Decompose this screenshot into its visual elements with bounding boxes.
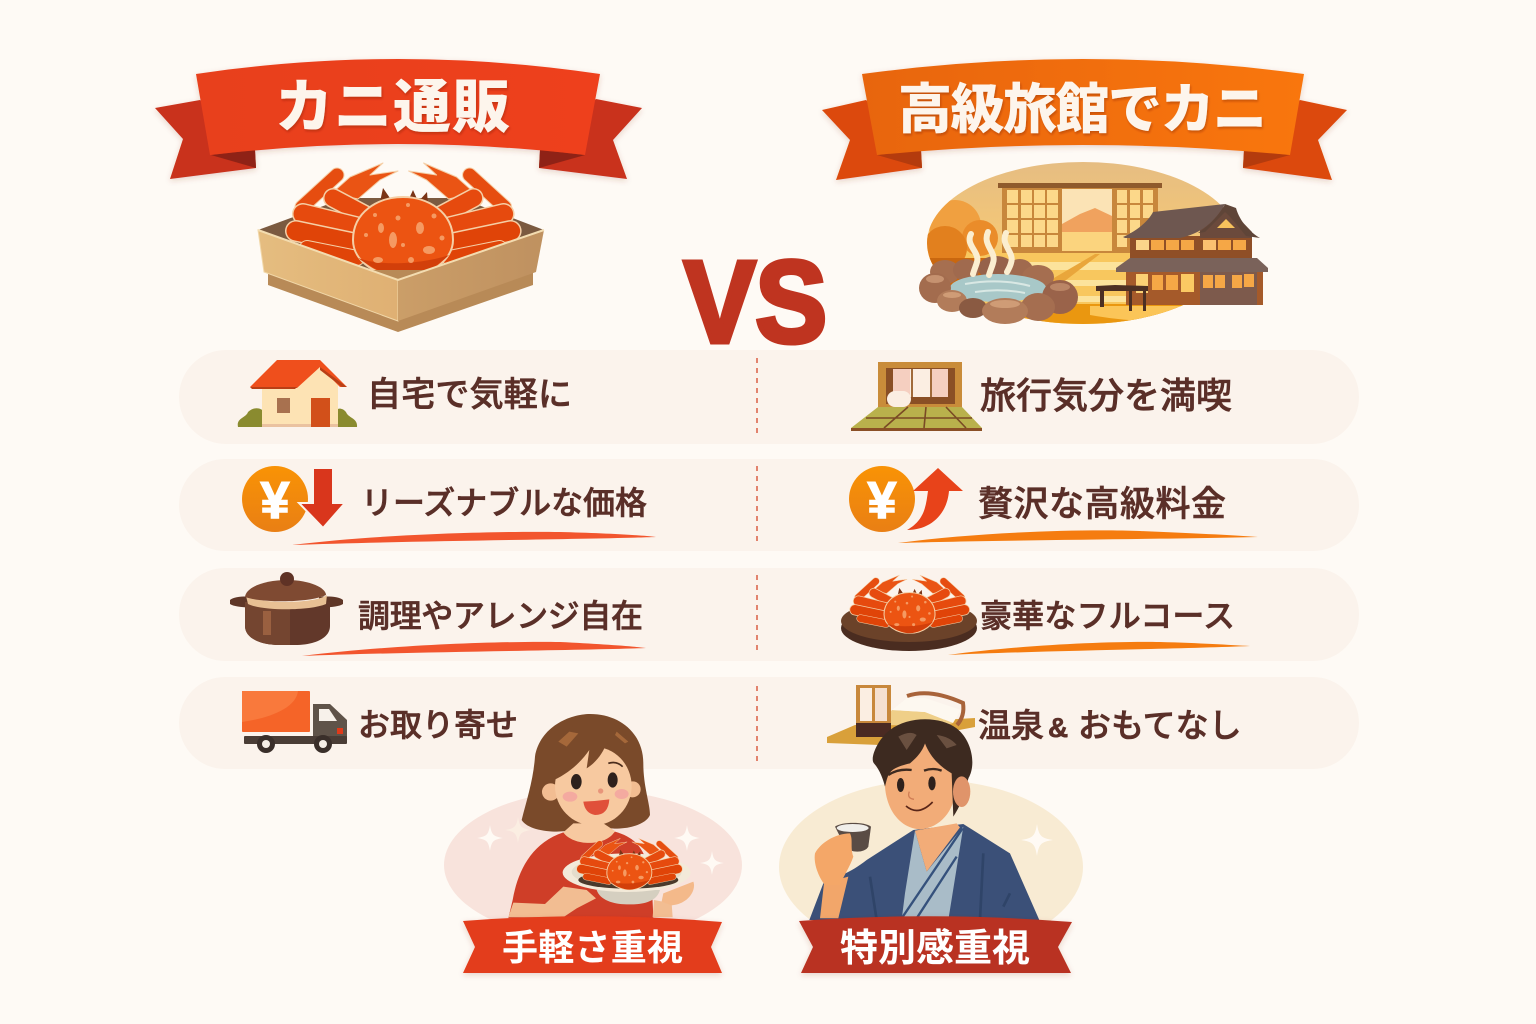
icon: yen coin with down arrow [242,466,345,532]
background oval [779,780,1083,954]
text: お取り寄せ [358,707,518,743]
illustration: ryokan and hot spring [919,162,1268,330]
icon: house [238,360,357,427]
underline stroke [292,532,656,545]
right item: 旅行気分を満喫 [851,362,1232,431]
text: 温泉 [978,707,1044,744]
background oval [444,790,742,940]
text: 自宅で気軽に [367,376,572,414]
icon: yen coin with down arrow: ¥ [261,472,290,530]
heading ribbon: カニ通販 [155,59,642,179]
underline stroke [948,642,1250,655]
label ribbon: 手軽さ重視: 手軽さ重視 [502,927,683,968]
icon: yen coin with up arrow [849,466,963,532]
hot spring rocks and water [919,256,1078,324]
text: 旅行気分を満喫 [980,375,1232,416]
label ribbon: 特別感重視: 特別感重視 [840,928,1030,970]
left item: リーズナブルな価格 [242,466,656,545]
right item: 贅沢な高級料金 [849,466,1258,543]
text: 豪華なフルコース [980,598,1235,634]
icon: delivery truck [242,691,347,753]
wooden bench [1096,285,1148,311]
underline stroke [898,530,1258,543]
text: リーズナブルな価格 [361,485,647,521]
character: man in yukata with sake cup [779,719,1083,954]
VS mark: VS [684,237,827,367]
left item: 自宅で気軽に [238,360,572,427]
text: おもてなし [1078,707,1242,744]
label ribbon: 特別感重視 [799,916,1072,973]
steam [970,232,1012,275]
icon: yen coin with up arrow: ¥ [868,472,897,530]
heading ribbon: カニ通販: カニ通販 [275,75,510,140]
icon: crab on dark platter [841,575,977,651]
sparkles [477,817,724,875]
left item: お取り寄せ [242,691,518,753]
comparison row backgrounds [179,350,1359,769]
heading ribbon: 高級旅館でカニ: 高級旅館でカニ [898,80,1267,140]
ryokan building [1116,204,1268,305]
left item: 調理やアレンジ自在 [230,572,646,656]
icon: cooking pot [230,572,343,645]
heading ribbon: 高級旅館でカニ [822,59,1347,180]
icon: lantern and towel tray [827,685,975,745]
sparkle [1021,824,1053,856]
text: 贅沢な高級料金 [978,485,1226,524]
underline stroke [302,642,646,656]
illustration: crab in wooden box [258,163,544,332]
label ribbon: 手軽さ重視 [463,916,722,973]
text: & [1048,712,1068,743]
shoji window [998,183,1162,253]
text: 調理やアレンジ自在 [358,598,643,634]
icon: tatami room [851,362,982,431]
crab on plate [581,838,678,890]
right item: 豪華なフルコース [841,575,1250,655]
character: woman holding crab plate [444,714,742,940]
right item: 温泉&おもてなし [827,685,1242,745]
